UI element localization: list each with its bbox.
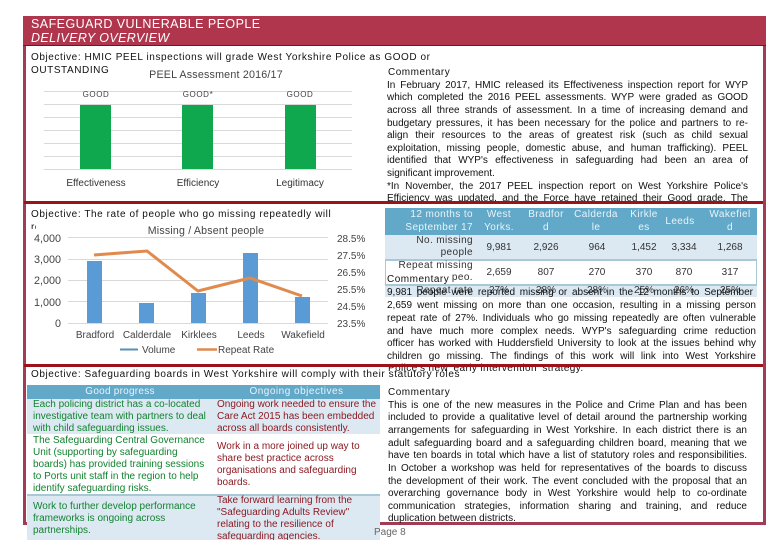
table: progress and objectives <box>27 385 380 540</box>
row: number missing <box>416 235 743 258</box>
good progress column: Each policing district has a co-located <box>33 399 200 410</box>
commentary: safeguarding boards: the development of their work. The event concluded with the proposal that an <box>388 476 747 487</box>
commentary: repeat missing: children go missing. The findings of this work will link into West Yorkshire <box>387 351 756 362</box>
bars <box>80 105 316 169</box>
chart title: Missing / Absent people <box>148 225 264 237</box>
objective: PEEL grading <box>31 52 431 76</box>
category labels: Bradford <box>76 330 114 341</box>
commentary: PEEL: In February 2017, HMIC released its Effectiveness inspection report for WYP <box>387 80 748 91</box>
commentary: safeguarding boards <box>388 387 747 524</box>
commentary: PEEL: across all three strands of assessment. In a time of increasing demand and <box>387 105 748 116</box>
row: repeat missing: 370 <box>636 267 652 278</box>
bar value labels: GOOD <box>287 90 313 99</box>
ongoing objectives column: across all boards consistently. <box>217 423 350 434</box>
category labels: Legitimacy <box>276 178 324 189</box>
good progress column: identify safeguarding risks. <box>33 483 151 494</box>
good progress column: The Safeguarding Central Governance <box>33 435 205 446</box>
header row: es <box>638 222 650 233</box>
ongoing objectives column: boards. <box>217 477 250 488</box>
ongoing objectives column <box>217 399 376 540</box>
commentary: PEEL: significant improvement. <box>387 168 495 179</box>
category labels: Kirklees <box>181 330 217 341</box>
row: repeat missing: 2,659 <box>486 267 512 278</box>
row: number missing: 1,268 <box>717 242 743 253</box>
category labels: Wakefield <box>281 330 325 341</box>
row: number missing: people <box>441 247 473 258</box>
table header: Good progress <box>85 386 155 397</box>
right axis labels: 25.5% <box>337 285 365 296</box>
row: repeat rate: 25% <box>634 285 654 296</box>
header row: September 17 <box>405 222 473 233</box>
table header: Ongoing objectives <box>249 386 344 397</box>
header row: Yorks. <box>484 222 514 233</box>
header row: Leeds <box>665 216 695 227</box>
chart title: PEEL Assessment 2016/17 <box>149 69 283 81</box>
left axis labels: 3,000 <box>34 254 61 266</box>
commentary: safeguarding boards: communication strategies, information sharing and training, and reduce <box>388 501 747 512</box>
objective: PEEL grading: OUTSTANDING <box>31 65 109 76</box>
row: repeat rate: 28% <box>587 285 607 296</box>
left axis labels: 2,000 <box>34 275 61 287</box>
category labels <box>76 330 325 341</box>
objective: repeat missing <box>31 209 331 229</box>
row: repeat rate: 25% <box>720 285 740 296</box>
chart: PEEL Assessment bar chart <box>44 69 352 189</box>
good progress column: Unit (supporting by safeguarding <box>33 447 178 458</box>
row: repeat missing <box>398 260 738 283</box>
category labels: Calderdale <box>123 330 172 341</box>
commentary: safeguarding boards: arrangements for safeguarding in West Yorkshire. In each district there is an <box>388 425 747 436</box>
commentary: safeguarding boards: have ten boards in total which have a list of statutory roles and responsibilities. <box>388 450 747 461</box>
row: number missing: No. missing <box>416 235 473 246</box>
ongoing objectives column: "Safeguarding Adults Review" <box>217 507 349 518</box>
header row: Bradfor <box>528 209 564 220</box>
header row: d <box>727 222 733 233</box>
commentary: PEEL <box>387 67 748 201</box>
bars: volume <box>87 253 310 323</box>
left axis labels: 4,000 <box>34 233 61 245</box>
left axis labels <box>34 233 61 330</box>
row: repeat rate <box>416 285 740 296</box>
line: repeat rate <box>94 251 302 296</box>
row: repeat missing: peo. <box>452 272 473 283</box>
right axis labels: 27.5% <box>337 251 365 262</box>
commentary: PEEL: identified that WYP's effectiveness in safeguarding had been an area of <box>387 155 748 166</box>
commentary: PEEL: exploitation, missing people, domestic abuse, and human trafficking). PEEL <box>387 143 748 154</box>
category labels: Effectiveness <box>66 178 126 189</box>
header row: Wakefiel <box>709 209 751 220</box>
right axis labels: 23.5% <box>337 319 365 330</box>
table: missing people by district <box>385 208 757 297</box>
commentary: safeguarding boards: included to provide a qualitative level of detail around the partnership working <box>388 412 747 423</box>
left axis labels: 1,000 <box>34 297 61 309</box>
commentary: safeguarding boards: duplication between districts. <box>388 513 516 524</box>
ongoing objectives column: Care Act 2015 has been embedded <box>217 411 374 422</box>
row: repeat rate: Repeat rate <box>416 285 473 296</box>
commentary: PEEL: budgetary pressures, it has been necessary for the police and partners to re- <box>387 118 748 129</box>
row: number missing: 964 <box>589 242 605 253</box>
commentary: safeguarding boards: Commentary <box>388 387 450 398</box>
row: repeat missing: 870 <box>676 267 692 278</box>
row: repeat missing: Repeat missing <box>398 260 473 271</box>
ongoing objectives column: relating to the resilience of <box>217 519 334 530</box>
row: repeat missing: 317 <box>722 267 738 278</box>
header row: Kirkle <box>630 209 658 220</box>
header row: 12 months to <box>410 209 473 220</box>
commentary: repeat missing: Police's new 'early intervention' strategy. <box>388 363 584 374</box>
page number: Page 8 <box>374 527 406 538</box>
left axis labels: 0 <box>55 318 61 330</box>
commentary: repeat missing: 2,659 went missing on more than one occasion, resulting in a missing person <box>387 300 756 311</box>
ongoing objectives column: share best practice across <box>217 453 334 464</box>
good progress column: Work to further develop performance <box>33 501 196 512</box>
legend: Repeat Rate <box>218 345 275 356</box>
commentary: safeguarding boards: This is one of the new measures in the Police and Crime Plan and has been <box>388 400 747 411</box>
title: SAFEGUARD VULNERABLE PEOPLE <box>31 17 261 31</box>
bar value labels: GOOD* <box>183 90 213 99</box>
commentary: safeguarding boards: adult safeguarding board and a safeguarding children board, meaning that we <box>388 438 747 449</box>
row: repeat rate: 26% <box>674 285 694 296</box>
commentary: repeat missing: 9,981 people were reported missing or absent in the 12 months to September <box>387 287 753 298</box>
commentary: safeguarding boards: In October a workshop was held for representatives of the boards to discuss <box>388 463 747 474</box>
good progress column <box>33 399 206 536</box>
table header <box>27 385 380 399</box>
header row: d <box>543 222 549 233</box>
good progress column: to Ports unit staff in the region to help <box>33 471 198 482</box>
row: repeat rate: 27% <box>489 285 509 296</box>
header row: Calderda <box>574 209 618 220</box>
row: number missing: 3,334 <box>671 242 697 253</box>
category labels: Leeds <box>237 330 265 341</box>
header row <box>405 209 751 233</box>
row: repeat rate: 28% <box>536 285 556 296</box>
legend: Volume <box>142 345 176 356</box>
good progress column: frameworks is ongoing across <box>33 513 165 524</box>
commentary: repeat missing: repeat rate of 27%. Individuals who go missing repeatedly are often vulnerable <box>387 313 756 324</box>
category labels <box>66 178 324 189</box>
header row: le <box>592 222 600 233</box>
divider <box>24 364 763 367</box>
right axis labels: 26.5% <box>337 268 365 279</box>
row: repeat missing: 270 <box>589 267 605 278</box>
category labels: Efficiency <box>177 178 219 189</box>
legend <box>120 345 275 356</box>
commentary: repeat missing: officer has worked with Huddersfield University to look at the issues behind why <box>387 338 756 349</box>
commentary: safeguarding boards: overarching governance body in West Yorkshire would help to co-ordinate <box>388 488 747 499</box>
subtitle: DELIVERY OVERVIEW <box>31 31 170 45</box>
header row: West <box>487 209 511 220</box>
bar value labels <box>83 90 313 99</box>
commentary: repeat missing <box>387 274 756 374</box>
objective: repeat missing: Objective: The rate of people who go missing repeatedly will <box>31 209 331 220</box>
commentary: PEEL: which completed the 2016 PEEL assessments. WYP were graded as GOOD <box>387 92 748 103</box>
row: number missing: 2,926 <box>533 242 559 253</box>
right axis labels <box>337 234 365 330</box>
bar value labels: GOOD <box>83 90 109 99</box>
good progress column: boards) has provided training sessions <box>33 459 204 470</box>
objective: safeguarding boards: Objective: Safeguarding boards in West Yorkshire will comply with their statutory roles <box>31 369 460 380</box>
commentary: repeat missing: Commentary <box>387 274 449 285</box>
row: number missing: 9,981 <box>486 242 512 253</box>
right axis labels: 24.5% <box>337 302 365 313</box>
divider <box>24 201 763 204</box>
good progress column: investigative team with partners to deal <box>33 411 206 422</box>
commentary: PEEL: align their resources to the areas of greatest risk (such as child sexual <box>387 130 748 141</box>
row: number missing: 1,452 <box>631 242 657 253</box>
commentary: PEEL: Commentary <box>388 67 450 78</box>
commentary: PEEL: *In November, the 2017 PEEL inspection report on West Yorkshire Police's <box>387 181 748 192</box>
commentary: repeat missing: and have much more complex needs. WYP's safeguarding crime reduction <box>387 326 756 337</box>
objective: PEEL grading: Objective: HMIC PEEL inspections will grade West Yorkshire Police as GOOD or <box>31 52 431 63</box>
chart: Missing / Absent people <box>34 222 366 356</box>
ongoing objectives column: Ongoing work needed to ensure the <box>217 399 376 410</box>
row: repeat missing: 807 <box>538 267 554 278</box>
header banner <box>23 16 766 46</box>
good progress column: with child safeguarding issues. <box>33 423 169 434</box>
ongoing objectives column: Take forward learning from the <box>217 495 352 506</box>
ongoing objectives column: organisations and safeguarding <box>217 465 357 476</box>
ongoing objectives column: Work in a more joined up way to <box>217 441 360 452</box>
right axis labels: 28.5% <box>337 234 365 245</box>
good progress column: partnerships. <box>33 525 91 536</box>
